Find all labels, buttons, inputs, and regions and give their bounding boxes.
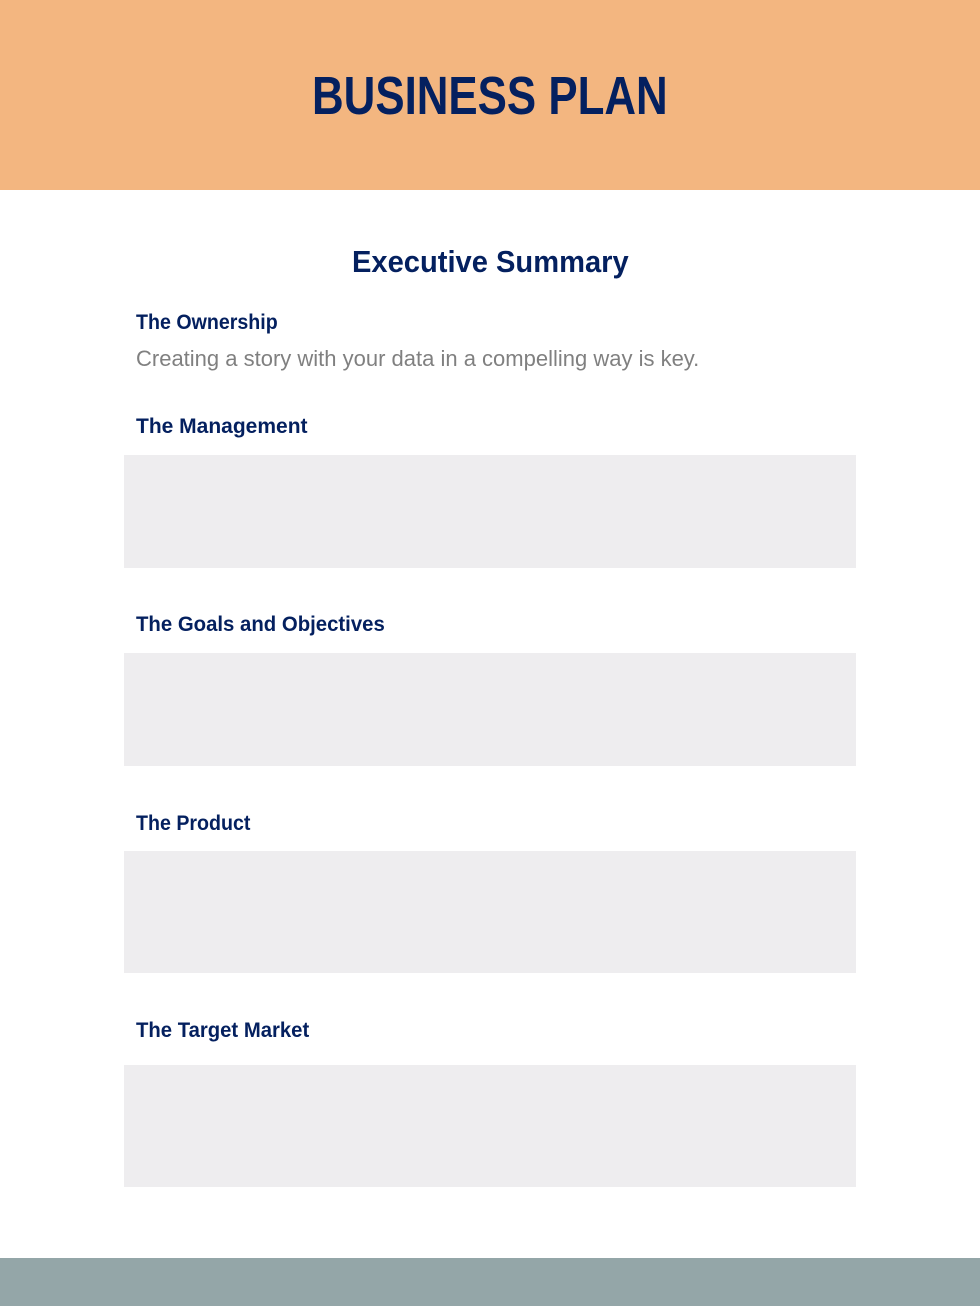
panel: product xyxy=(124,851,856,973)
heading: The Product: The Product xyxy=(136,812,250,835)
panel: target market xyxy=(124,1065,856,1187)
title: BUSINESS PLAN xyxy=(312,66,668,126)
heading: The Management: The Management xyxy=(136,415,308,438)
text block: ownership description: Creating a story with your data in a compelling way is key. xyxy=(136,346,699,371)
footer band xyxy=(0,1258,980,1306)
panel: management xyxy=(124,455,856,568)
panel: goals and objectives xyxy=(124,653,856,766)
heading: The Ownership: The Ownership xyxy=(136,311,278,334)
heading: The Goals and Objectives: The Goals and Objectives xyxy=(136,613,385,636)
section heading: Executive Summary xyxy=(352,244,629,279)
heading: The Target Market: The Target Market xyxy=(136,1019,309,1042)
header band xyxy=(0,0,980,190)
